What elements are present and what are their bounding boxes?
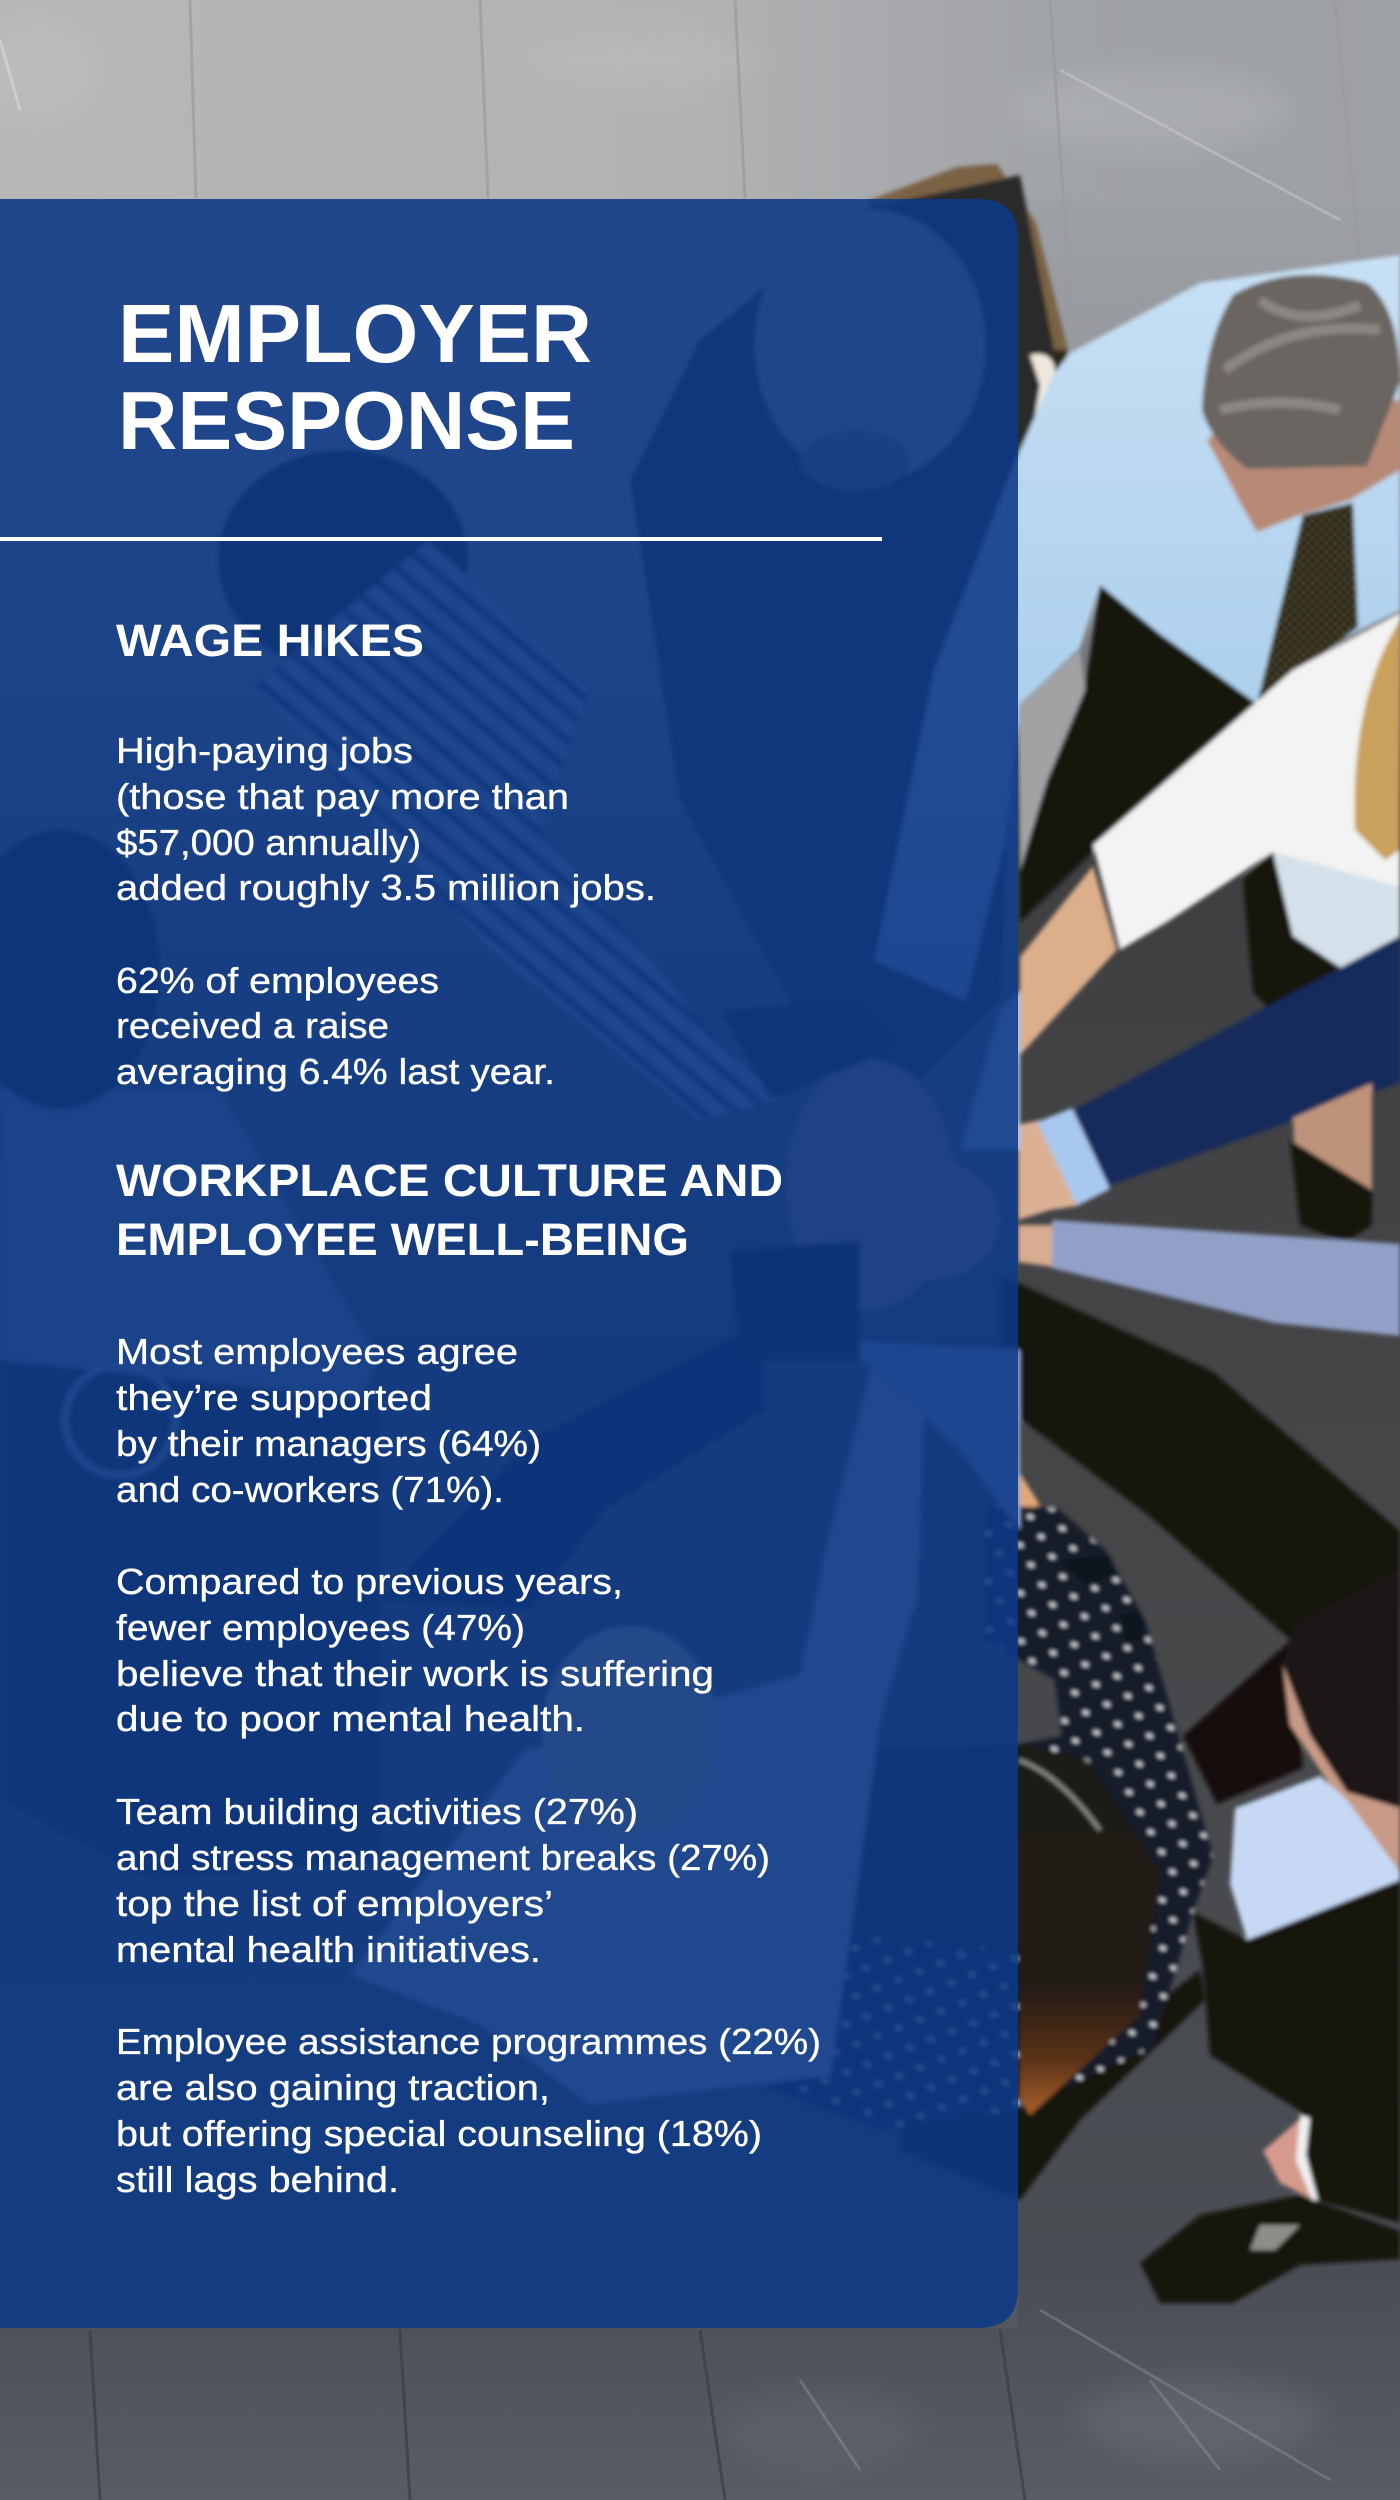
text block: mental health: believe that their work is suffering [116,1653,714,1694]
figure: periwinkle sleeve [1018,1225,1060,1268]
figure: navy sleeve with light cuff [1018,1120,1077,1220]
text block: mental health: due to poor mental health. [116,1698,585,1739]
text block: support: they’re supported [116,1377,432,1418]
text block: raises: averaging 6.4% last year. [116,1051,555,1092]
text block: assistance programmes: are also gaining traction, [116,2067,550,2108]
text block: high-paying jobs: added roughly 3.5 million jobs. [116,867,656,908]
title: RESPONSE [118,374,575,467]
text block: assistance programmes: still lags behind. [116,2159,399,2200]
text block: team building: and stress management breaks (27%) [116,1837,770,1878]
text block: support [116,1331,541,1510]
figure: woman with polka dot jacket [900,1970,1205,2200]
text block: raises: received a raise [116,1005,389,1046]
title [118,287,592,467]
figure: woman in white blouse [1020,866,1117,1055]
text block: team building: top the list of employers’ [116,1883,553,1924]
text block: mental health [116,1561,714,1739]
text block: high-paying jobs: $57,000 annually) [116,822,421,863]
text block: support: by their managers (64%) [116,1423,541,1464]
text block: raises: 62% of employees [116,960,439,1001]
text block: team building: mental health initiatives. [116,1929,541,1970]
text block: support: and co-workers (71%). [116,1469,504,1510]
text block: mental health: Compared to previous years, [116,1561,623,1602]
heading: wage hikes: WAGE HIKES [116,615,424,666]
figure: man in black suit at lower right [1183,1641,1303,1804]
text block: high-paying jobs: (those that pay more than [116,776,569,817]
panel: translucent blue content card [0,199,1018,2328]
text block: assistance programmes: but offering special counseling (18%) [116,2113,762,2154]
figure: brown-suited person at top [870,164,1068,470]
text block: high-paying jobs: High-paying jobs [116,730,413,771]
ghost figures behind the blue panel [0,1090,380,1500]
figure: man in light blue shirt [875,255,1400,1000]
title: EMPLOYER [118,287,592,380]
heading: workplace culture [116,1155,783,1265]
text block: high-paying jobs [116,730,656,908]
text block: support: Most employees agree [116,1331,518,1372]
text block: mental health: fewer employees (47%) [116,1607,525,1648]
figure: black sleeved arm [1000,1275,1400,1640]
text block: team building: Team building activities (27%) [116,1791,638,1832]
text block: team building [116,1791,770,1970]
text block: assistance programmes [116,2021,821,2200]
heading: workplace culture: EMPLOYEE WELL-BEING [116,1214,689,1265]
text block: raises [116,960,555,1092]
heading: workplace culture: WORKPLACE CULTURE AND [116,1155,783,1206]
text block: assistance programmes: Employee assistance programmes (22%) [116,2021,821,2062]
